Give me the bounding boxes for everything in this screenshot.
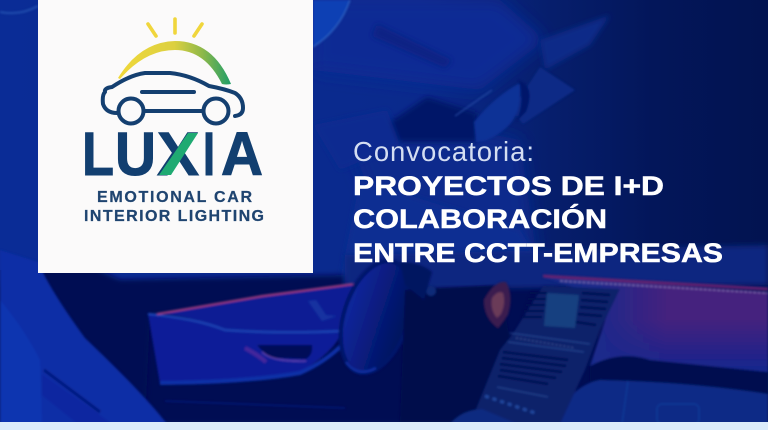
icon: car outline: [103, 73, 243, 124]
wordmark: LUXIA: U: [115, 120, 156, 188]
bottom strip: [0, 422, 768, 430]
door panel: [148, 283, 353, 408]
heading: call text: [353, 136, 723, 268]
heading: call text: ENTRE CCTT-EMPRESAS: [353, 238, 723, 268]
wordmark: LUXIA: [82, 120, 263, 188]
heading: call text: COLABORACIÓN: [353, 204, 607, 234]
steering wheel: [328, 252, 424, 382]
tagline: INTERIOR LIGHTING: [84, 208, 264, 225]
door handle: [257, 345, 312, 359]
wordmark: LUXIA: I: [203, 120, 215, 188]
rear-view mirror: [455, 67, 575, 142]
heading: call text: PROYECTOS DE I+D: [353, 171, 664, 201]
wordmark: LUXIA: X: [157, 120, 199, 188]
wordmark: LUXIA: L: [82, 120, 114, 188]
left seat: [0, 250, 167, 424]
icon: sun arc: [118, 41, 231, 84]
tagline: EMOTIONAL CAR: [97, 189, 252, 206]
panel: logo card: [38, 0, 313, 273]
wordmark: LUXIA: A: [221, 120, 263, 188]
instrument cluster: [484, 282, 511, 328]
center console: [450, 286, 620, 424]
heading: call text: Convocatoria:: [353, 136, 534, 167]
icon: sun rays: [148, 19, 202, 36]
tagline: [84, 189, 264, 225]
dashboard: [543, 276, 768, 424]
